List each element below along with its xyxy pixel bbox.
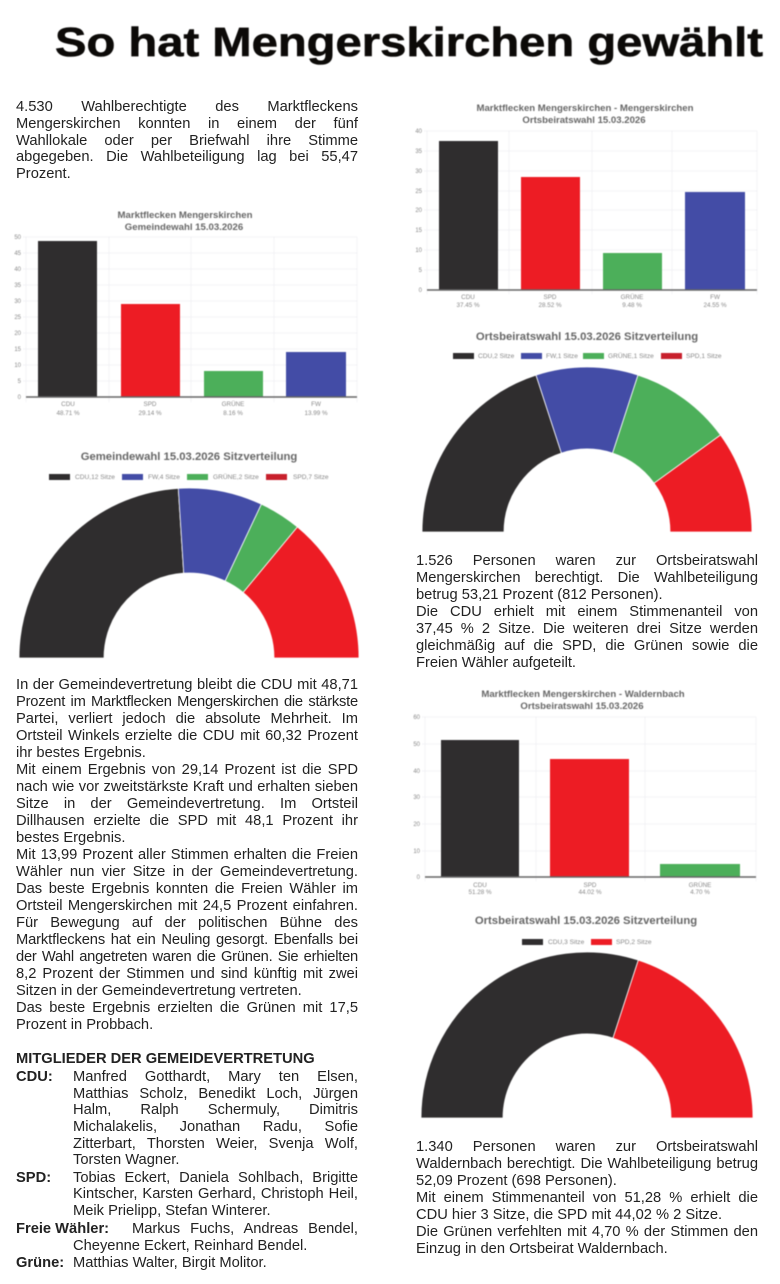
bar chart: Ortsbeiratswahl Mengerskirchen: Marktflecken Mengerskirchen - Mengerskirchen xyxy=(476,103,694,114)
text block: Gemeindewahl analysis: Dillhausen erzielte die SPD mit 48,1 Prozent ihr xyxy=(16,813,358,829)
bar chart: Ortsbeiratswahl Mengerskirchen: SPD xyxy=(544,294,557,301)
text block: Gemeindewahl analysis: 8,2 Prozent der Stimmen und sind künftig mit zwei xyxy=(16,966,358,982)
text block: Ortsbeiratswahl Mengerskirchen: 1.526 Personen waren zur Ortsbeiratswahl xyxy=(416,553,758,569)
bar chart: Ortsbeiratswahl Waldernbach: Marktflecken Mengerskirchen - Waldernbach xyxy=(481,689,685,700)
text block: Mitglieder der Gemeindevertretung: Zitterbart, Thorsten Weier, Svenja Wolf, xyxy=(73,1136,358,1152)
text block: Mitglieder der Gemeindevertretung: CDU: xyxy=(16,1068,53,1084)
bar chart: Gemeindewahl: CDU xyxy=(61,401,75,408)
bar chart: Gemeindewahl: FW xyxy=(311,401,321,408)
text block: Gemeindewahl analysis: Sitzen in der Gemeindevertretung vertreten. xyxy=(16,983,302,999)
bar chart: Gemeindewahl: 48.71 % xyxy=(56,410,80,417)
bar chart: Ortsbeiratswahl Waldernbach: 0 xyxy=(417,875,421,881)
text block: Gemeindewahl analysis xyxy=(16,677,358,1033)
bar chart: Gemeindewahl: 15 xyxy=(14,347,22,353)
text block: Gemeindewahl analysis: nach wie vor zweitstärkste Kraft und erhalten sieben xyxy=(16,779,358,795)
text block: Ortsbeiratswahl Mengerskirchen: betrug 53,21 Prozent (812 Personen). xyxy=(416,587,663,603)
text block: Mitglieder der Gemeindevertretung: Matthias Walter, Birgit Molitor. xyxy=(73,1254,267,1270)
bar chart: Gemeindewahl: Gemeindewahl 15.03.2026 xyxy=(125,222,243,233)
text block: Mitglieder der Gemeindevertretung: Matthias Scholz, Benedikt Loch, Jürgen xyxy=(73,1086,358,1102)
text block: Mitglieder der Gemeindevertretung: Kintscher, Karsten Gerhard, Christoph Heil, xyxy=(73,1186,358,1202)
text block: Gemeindewahl analysis: Wähler nun vier Sitze in der Gemeindevertretung. xyxy=(16,864,358,880)
text block: Gemeindewahl analysis: Das beste Ergebnis konnten die Freien Wähler im xyxy=(16,881,358,897)
bar chart: Ortsbeiratswahl Mengerskirchen: GRÜNE xyxy=(621,293,643,301)
legend: Mengerskirchen seats: CDU,2 Sitze xyxy=(478,353,515,360)
bar chart: Gemeindewahl: 8.16 % xyxy=(223,410,243,417)
text block: Gemeindewahl analysis: Mit einem Ergebnis von 29,14 Prozent ist die SPD xyxy=(16,762,358,778)
text block: Gemeindewahl analysis: ihr bestes Ergebnis. xyxy=(16,745,146,761)
bar chart: Gemeindewahl: 25 xyxy=(14,315,22,321)
title: So hat Mengerskirchen gewählt xyxy=(55,19,763,65)
text block: Ortsbeiratswahl Mengerskirchen: 37,45 % 2 Sitze. Die weiteren drei Sitze werden xyxy=(416,621,758,637)
bar chart: Ortsbeiratswahl Waldernbach: Ortsbeiratswahl 15.03.2026 xyxy=(520,701,644,712)
text block: Ortsbeiratswahl Waldernbach xyxy=(416,1139,758,1257)
bar chart: Ortsbeiratswahl Mengerskirchen: FW xyxy=(710,294,720,301)
text block: Mitglieder der Gemeindevertretung xyxy=(16,1050,358,1270)
text block: Mitglieder der Gemeindevertretung: Michalakelis, Jonathan Radu, Sofie xyxy=(73,1118,358,1134)
legend: Mengerskirchen seats: GRÜNE,1 Sitze xyxy=(608,352,654,360)
text block: intro xyxy=(16,99,358,182)
text block: Gemeindewahl analysis: Mit 13,99 Prozent aller Stimmen erhalten die Freien xyxy=(16,847,358,863)
bar chart: Gemeindewahl: 0 xyxy=(18,395,22,401)
bar chart: Ortsbeiratswahl Mengerskirchen: CDU xyxy=(461,294,475,301)
text block: Ortsbeiratswahl Mengerskirchen: Freien Wähler aufgeteilt. xyxy=(416,655,576,671)
legend: Waldernbach seats xyxy=(522,939,652,946)
semicircle chart: Mengerskirchen seats xyxy=(422,367,752,532)
text block: Ortsbeiratswahl Waldernbach: Einzug in den Ortsbeirat Waldernbach. xyxy=(416,1241,668,1257)
semicircle chart: Gemeindewahl seats xyxy=(19,488,359,658)
text block: Ortsbeiratswahl Waldernbach: 52,09 Prozent (698 Personen). xyxy=(416,1173,617,1189)
text block: Gemeindewahl analysis: In der Gemeindevertretung bleibt die CDU mit 48,71 xyxy=(16,677,358,693)
bar chart: Ortsbeiratswahl Mengerskirchen: 10 xyxy=(415,248,423,254)
text block: Mitglieder der Gemeindevertretung: Tobias Eckert, Daniela Sohlbach, Brigitte xyxy=(73,1170,358,1186)
heading: Gemeindewahl Sitzverteilung: Gemeindewahl 15.03.2026 Sitzverteilung xyxy=(81,451,297,463)
text block: Ortsbeiratswahl Mengerskirchen: Mengerskirchen berechtigt. Die Wahlbeteiligung xyxy=(416,570,758,586)
bar chart: Ortsbeiratswahl Mengerskirchen: Ortsbeiratswahl 15.03.2026 xyxy=(522,115,646,126)
bar chart: Ortsbeiratswahl Mengerskirchen xyxy=(415,103,757,309)
bar chart: Ortsbeiratswahl Mengerskirchen: 28.52 % xyxy=(538,302,562,309)
bar chart: Ortsbeiratswahl Waldernbach: 20 xyxy=(413,822,421,828)
legend: Gemeindewahl seats: CDU,12 Sitze xyxy=(75,474,115,481)
text block: Gemeindewahl analysis: Ortsteil Mengerskirchen mit 24,5 Prozent einfahren. xyxy=(16,898,358,914)
bar chart: Ortsbeiratswahl Mengerskirchen: 30 xyxy=(415,169,423,175)
text block: Mitglieder der Gemeindevertretung: Markus Fuchs, Andreas Bendel, xyxy=(132,1220,358,1236)
bar chart: Gemeindewahl: 20 xyxy=(14,331,22,337)
bar chart: Ortsbeiratswahl Waldernbach: 40 xyxy=(413,769,421,775)
text block: Ortsbeiratswahl Mengerskirchen: gleichmäßig auf die SPD, die Grünen sowie die xyxy=(416,638,758,654)
bar chart: Gemeindewahl: GRÜNE xyxy=(222,400,244,408)
bar chart: Ortsbeiratswahl Mengerskirchen: 15 xyxy=(415,228,423,234)
text block: Mitglieder der Gemeindevertretung: Torsten Wagner. xyxy=(73,1152,179,1168)
bar chart: Gemeindewahl: 5 xyxy=(18,379,22,385)
text block: intro: abgegeben. Die Wahlbeteiligung lag bei 55,47 xyxy=(16,149,358,165)
text block: Gemeindewahl analysis: Das beste Ergebnis erzielten die Grünen mit 17,5 xyxy=(16,1000,358,1016)
bar chart: Ortsbeiratswahl Mengerskirchen: 24.55 % xyxy=(703,302,727,309)
text block: Gemeindewahl analysis: Prozent im Marktflecken Mengerskirchen die stärkste xyxy=(16,694,358,710)
legend: Mengerskirchen seats: FW,1 Sitze xyxy=(546,353,578,360)
text block: Gemeindewahl analysis: Marktfleckens hat ein Neuling gesorgt. Ebenfalls bei xyxy=(16,932,358,948)
heading: Ortsbeiratswahl Mengerskirchen Sitzverteilung: Ortsbeiratswahl 15.03.2026 Sitzverteilung xyxy=(476,331,698,343)
bar chart: Gemeindewahl: 35 xyxy=(14,283,22,289)
bar chart: Ortsbeiratswahl Waldernbach: 60 xyxy=(413,715,421,721)
text block: Ortsbeiratswahl Mengerskirchen xyxy=(416,553,758,671)
text block: intro: Prozent. xyxy=(16,166,71,182)
bar chart: Ortsbeiratswahl Mengerskirchen: 0 xyxy=(419,288,423,294)
bar chart: Ortsbeiratswahl Waldernbach: SPD xyxy=(584,882,597,889)
text block: Gemeindewahl analysis: Für Bewegung auf der politischen Bühne des xyxy=(16,915,358,931)
semicircle chart: Waldernbach seats xyxy=(421,952,753,1118)
bar chart: Ortsbeiratswahl Waldernbach: 50 xyxy=(413,742,421,748)
text block: Gemeindewahl analysis: Partei, verliert jedoch die absolute Mehrheit. Im xyxy=(16,711,358,727)
legend: Gemeindewahl seats: GRÜNE,2 Sitze xyxy=(213,473,259,481)
bar chart: Ortsbeiratswahl Mengerskirchen: 25 xyxy=(415,189,423,195)
bar chart: Gemeindewahl: Marktflecken Mengerskirchen xyxy=(118,210,253,221)
bar chart: Gemeindewahl: 30 xyxy=(14,299,22,305)
bar chart: Ortsbeiratswahl Mengerskirchen: 35 xyxy=(415,149,423,155)
text block: intro: 4.530 Wahlberechtigte des Marktfleckens xyxy=(16,99,358,115)
bar chart: Ortsbeiratswahl Waldernbach: 44.02 % xyxy=(578,889,602,896)
text block: Ortsbeiratswahl Waldernbach: Die Grünen verfehlten mit 4,70 % der Stimmen den xyxy=(416,1224,758,1240)
text block: Gemeindewahl analysis: Sitze in der Gemeindevertretung. Im Ortsteil xyxy=(16,796,358,812)
bar chart: Gemeindewahl: 13.99 % xyxy=(304,410,328,417)
text block: Gemeindewahl analysis: der Wahl angetreten waren die Grünen. Sie erhielten xyxy=(16,949,358,965)
text block: intro: Mengerskirchen konnten in einem der fünf xyxy=(16,116,358,132)
legend: Waldernbach seats: SPD,2 Sitze xyxy=(616,939,652,946)
bar chart: Gemeindewahl: 10 xyxy=(14,363,22,369)
bar chart: Ortsbeiratswahl Waldernbach: CDU xyxy=(473,882,487,889)
bar chart: Ortsbeiratswahl Mengerskirchen: 5 xyxy=(419,268,423,274)
text block: Mitglieder der Gemeindevertretung: Meik Prielipp, Stefan Winterer. xyxy=(73,1202,271,1218)
bar chart: Ortsbeiratswahl Waldernbach xyxy=(413,689,756,896)
text block: Ortsbeiratswahl Waldernbach: 1.340 Personen waren zur Ortsbeiratswahl xyxy=(416,1139,758,1155)
bar chart: Gemeindewahl xyxy=(14,210,357,417)
text block: Ortsbeiratswahl Waldernbach: CDU hier 3 Sitze, die SPD mit 44,02 % 2 Sitze. xyxy=(416,1207,722,1223)
text block: intro: Wahllokale oder per Briefwahl ihre Stimme xyxy=(16,133,358,149)
bar chart: Ortsbeiratswahl Waldernbach: 51.28 % xyxy=(468,889,492,896)
heading: Ortsbeiratswahl Waldernbach Sitzverteilung: Ortsbeiratswahl 15.03.2026 Sitzverteilung xyxy=(475,915,697,927)
bar chart: Ortsbeiratswahl Mengerskirchen: 37.45 % xyxy=(456,302,480,309)
text block: Gemeindewahl analysis: Ortsteil Winkels erzielte die CDU mit 60,32 Prozent xyxy=(16,728,358,744)
text block: Ortsbeiratswahl Waldernbach: Mit einem Stimmenanteil von 51,28 % erhielt die xyxy=(416,1190,758,1206)
bar chart: Gemeindewahl: 50 xyxy=(14,235,22,241)
text block: Mitglieder der Gemeindevertretung: Freie Wähler: xyxy=(16,1220,109,1236)
text block: Mitglieder der Gemeindevertretung: Manfred Gotthardt, Mary ten Elsen, xyxy=(73,1068,358,1084)
text block: Mitglieder der Gemeindevertretung: Grüne: xyxy=(16,1254,64,1270)
text block: Ortsbeiratswahl Mengerskirchen: Die CDU erhielt mit einem Stimmenanteil von xyxy=(416,604,758,620)
text block: Mitglieder der Gemeindevertretung: Cheyenne Eckert, Reinhard Bendel. xyxy=(73,1238,307,1254)
legend: Gemeindewahl seats: SPD,7 Sitze xyxy=(293,474,329,481)
bar chart: Ortsbeiratswahl Mengerskirchen: 40 xyxy=(415,129,423,135)
bar chart: Ortsbeiratswahl Mengerskirchen: 20 xyxy=(415,208,423,214)
text block: Gemeindewahl analysis: Prozent in Probbach. xyxy=(16,1017,153,1033)
bar chart: Ortsbeiratswahl Mengerskirchen: 9.48 % xyxy=(622,302,642,309)
legend: Mengerskirchen seats xyxy=(453,352,722,360)
text block: Ortsbeiratswahl Waldernbach: Waldernbach berechtigt. Die Wahlbeteiligung betrug xyxy=(416,1156,758,1172)
legend: Waldernbach seats: CDU,3 Sitze xyxy=(548,939,585,946)
bar chart: Ortsbeiratswahl Waldernbach: GRÜNE xyxy=(689,881,711,889)
bar chart: Ortsbeiratswahl Waldernbach: 4.70 % xyxy=(690,889,710,896)
bar chart: Gemeindewahl: 29.14 % xyxy=(138,410,162,417)
bar chart: Gemeindewahl: 45 xyxy=(14,251,22,257)
bar chart: Ortsbeiratswahl Waldernbach: 10 xyxy=(413,849,421,855)
text block: Mitglieder der Gemeindevertretung: Halm, Ralph Schermuly, Dimitris xyxy=(73,1102,358,1118)
text block: Mitglieder der Gemeindevertretung: MITGLIEDER DER GEMEIDEVERTRETUNG xyxy=(16,1050,315,1066)
bar chart: Gemeindewahl: SPD xyxy=(144,401,157,408)
text block: Mitglieder der Gemeindevertretung: SPD: xyxy=(16,1170,51,1186)
legend: Gemeindewahl seats xyxy=(49,473,329,481)
bar chart: Gemeindewahl: 40 xyxy=(14,267,22,273)
legend: Mengerskirchen seats: SPD,1 Sitze xyxy=(686,353,722,360)
text block: Gemeindewahl analysis: bestes Ergebnis. xyxy=(16,830,125,846)
bar chart: Ortsbeiratswahl Waldernbach: 30 xyxy=(413,795,421,801)
legend: Gemeindewahl seats: FW,4 Sitze xyxy=(148,474,180,481)
